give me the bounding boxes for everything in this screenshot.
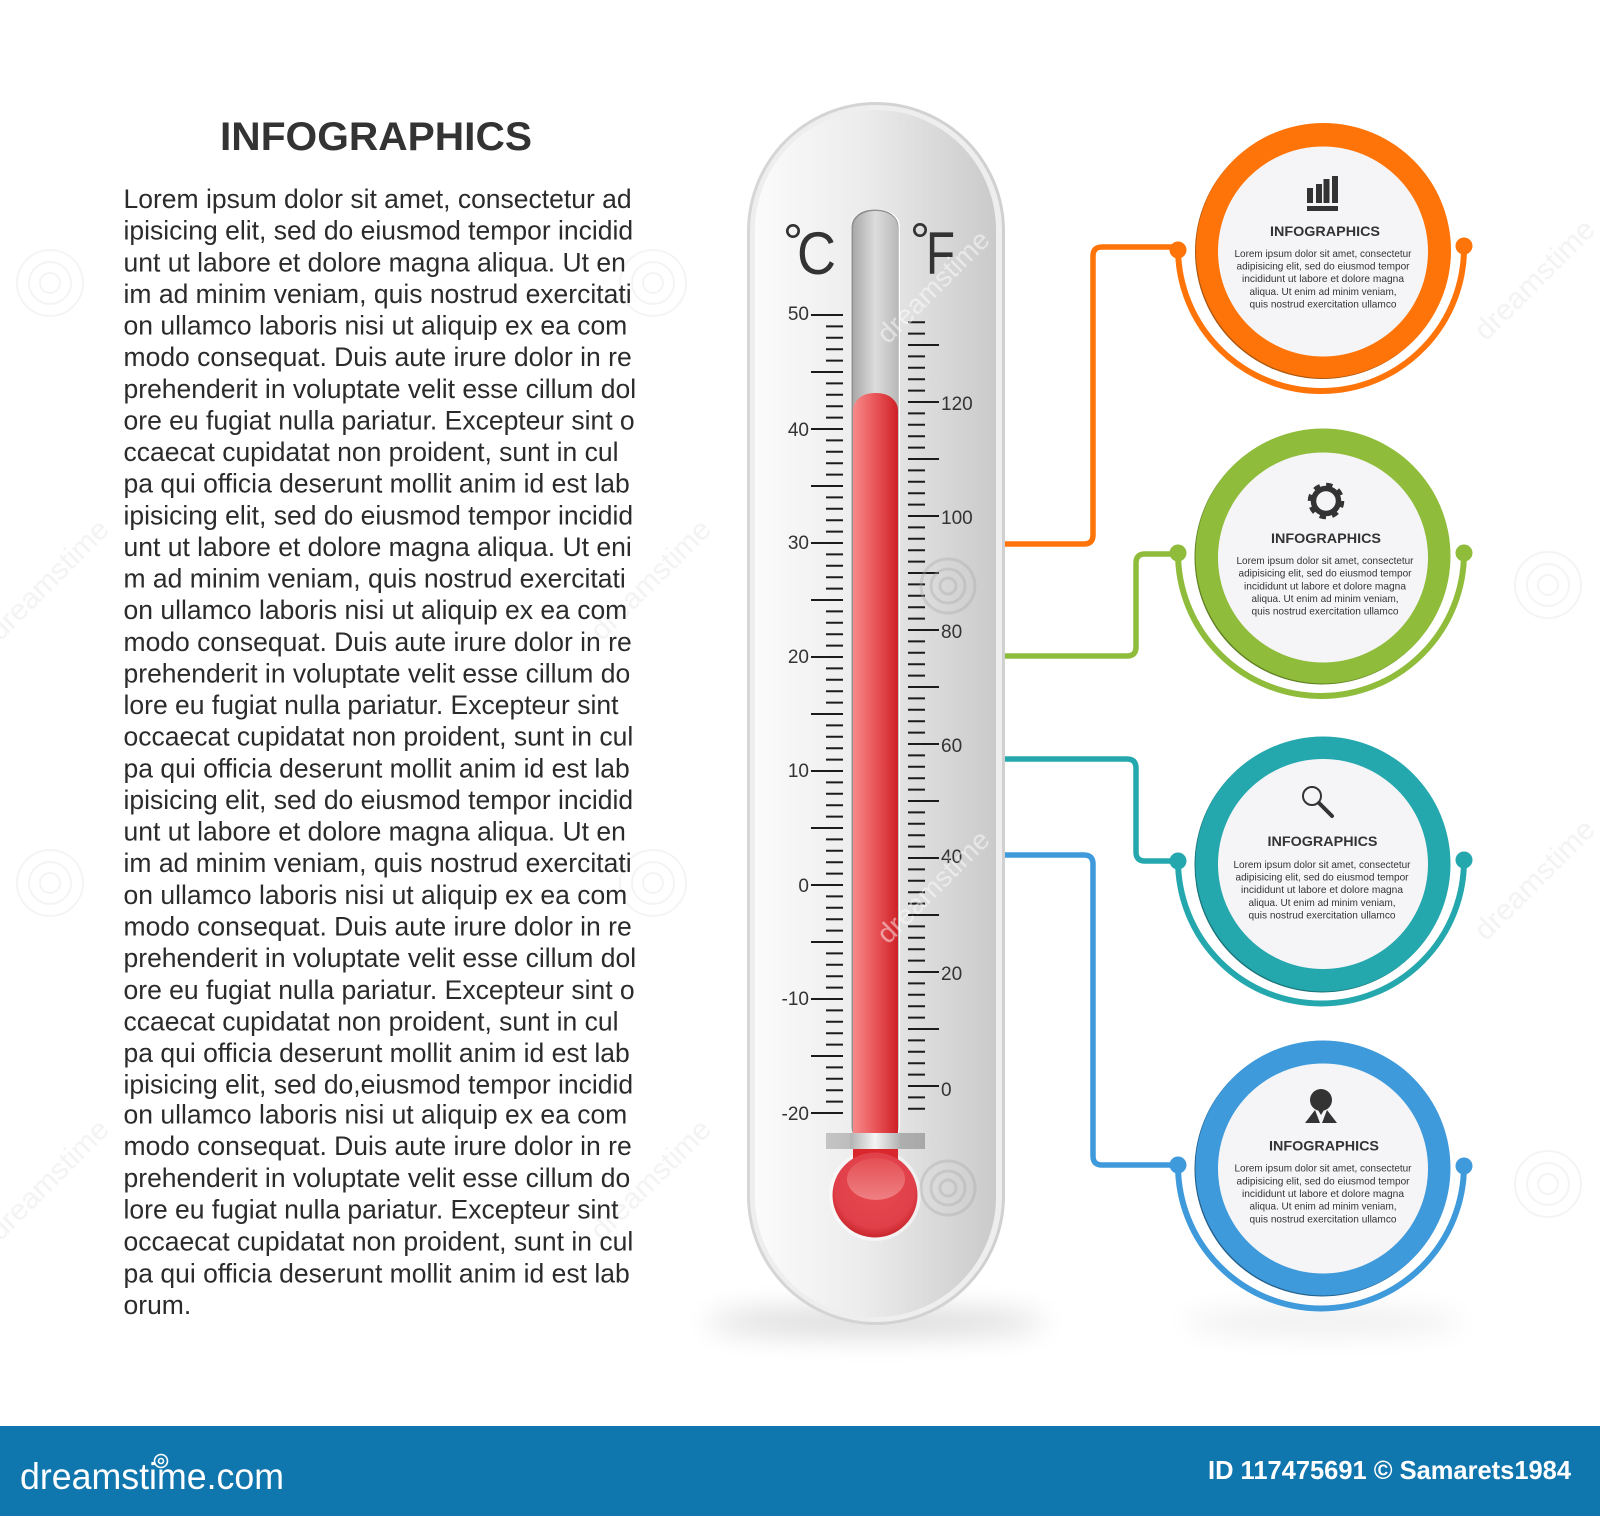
orange ring [1195, 123, 1451, 379]
fahrenheit unit: ° [910, 213, 930, 269]
text block: lorem ipsum paragraph [124, 184, 636, 1320]
celsius scale ticks [818, 314, 834, 1114]
green arc with dots [1170, 544, 1472, 696]
body text: Lorem ipsum dolor sit amet, consectetur [1236, 556, 1414, 567]
text block: lorem ipsum paragraph: m ad minim veniam, quis nostrud exercitati [124, 564, 626, 594]
text block: lorem ipsum paragraph: unt ut labore et dolore magna aliqua. Ut en [124, 817, 626, 847]
blue ring [1194, 1040, 1450, 1296]
body text: adipisicing elit, sed do eiusmod tempor [1238, 569, 1412, 580]
fahrenheit labels: 0 [941, 1080, 952, 1101]
connector: teal [1005, 759, 1178, 861]
heading: INFOGRAPHICS [1268, 833, 1378, 849]
text: dreamstime [584, 513, 718, 647]
fahrenheit labels: 40 [941, 847, 962, 868]
text block: lorem ipsum paragraph: on ullamco laboris nisi ut aliquip ex ea com [124, 1099, 627, 1129]
thermometer body [747, 102, 1005, 1325]
text block: lorem ipsum paragraph: on ullamco laboris nisi ut aliquip ex ea com [124, 595, 627, 625]
body text [1234, 860, 1411, 921]
orange arc with dots [1170, 238, 1472, 391]
body text: Lorem ipsum dolor sit amet, consectetur [1234, 249, 1412, 260]
text block: lorem ipsum paragraph: ore eu fugiat nulla pariatur. Excepteur sint o [124, 975, 635, 1005]
text block: lorem ipsum paragraph: ccaecat cupidatat non proident, sunt in cul [124, 437, 618, 467]
body text: adipisicing elit, sed do eiusmod tempor [1236, 262, 1410, 273]
text block: lorem ipsum paragraph: prehenderit in voluptate velit esse cillum dol [124, 374, 636, 404]
text block: lorem ipsum paragraph: ipisicing elit, sed do,eiusmod tempor incidid [124, 1070, 633, 1100]
icon: bar chart [1307, 176, 1338, 211]
body text [1234, 1164, 1412, 1225]
body text: quis nostrud exercitation ullamco [1248, 910, 1396, 921]
text block: lorem ipsum paragraph: ipisicing elit, sed do eiusmod tempor incidid [124, 785, 633, 815]
text: dreamstime [584, 1113, 718, 1247]
heading: INFOGRAPHICS [1269, 1138, 1379, 1154]
footer bar [0, 1426, 1600, 1516]
body text: adipisicing elit, sed do eiusmod tempor [1236, 1176, 1410, 1187]
celsius labels: -10 [782, 989, 809, 1010]
body text [1236, 556, 1414, 618]
text block: lorem ipsum paragraph: prehenderit in voluptate velit esse cillum dol [124, 943, 636, 973]
icon: magnifier [1303, 787, 1332, 816]
bulb [829, 1145, 921, 1241]
celsius labels: 50 [788, 304, 809, 325]
body text: incididunt ut labore et dolore magna [1242, 1189, 1404, 1200]
text block: lorem ipsum paragraph: pa qui officia deserunt mollit anim id est lab [124, 1038, 630, 1068]
celsius labels [782, 304, 809, 1125]
text block: lorem ipsum paragraph: im ad minim veniam, quis nostrud exercitati [124, 848, 632, 878]
text block: lorem ipsum paragraph: on ullamco laboris nisi ut aliquip ex ea com [124, 880, 627, 910]
text block: lorem ipsum paragraph: Lorem ipsum dolor sit amet, consectetur ad [124, 184, 632, 214]
celsius unit: ° [783, 214, 803, 270]
icon: person [1305, 1089, 1337, 1123]
connector: green [1005, 554, 1178, 656]
connector: blue [1005, 855, 1178, 1165]
text block: lorem ipsum paragraph: im ad minim veniam, quis nostrud exercitati [124, 279, 632, 309]
fahrenheit unit: F [926, 220, 955, 287]
celsius unit: C [797, 220, 836, 287]
thermometer shadow [706, 1308, 1046, 1336]
teal ring [1194, 736, 1450, 992]
fahrenheit labels: 100 [941, 508, 973, 529]
body text: incididunt ut labore et dolore magna [1242, 274, 1404, 285]
celsius labels: 0 [798, 876, 809, 897]
celsius labels: 40 [788, 420, 809, 441]
body text: incididunt ut labore et dolore magna [1244, 581, 1406, 592]
text block: lorem ipsum paragraph: lore eu fugiat nulla pariatur. Excepteur sint [124, 1195, 619, 1225]
text block: lorem ipsum paragraph: modo consequat. Duis aute irure dolor in re [124, 1131, 632, 1161]
panel: teal circle [1170, 736, 1472, 1004]
text block: lorem ipsum paragraph: pa qui officia deserunt mollit anim id est lab [124, 469, 630, 499]
icon: gear [1310, 485, 1342, 517]
body text: Lorem ipsum dolor sit amet, consectetur [1234, 860, 1411, 871]
text block: lorem ipsum paragraph: unt ut labore et dolore magna aliqua. Ut eni [124, 532, 632, 562]
text block: lorem ipsum paragraph: ipisicing elit, sed do eiusmod tempor incidid [124, 500, 633, 530]
body text: incididunt ut labore et dolore magna [1241, 885, 1403, 896]
text: dreamstime [870, 224, 996, 349]
text block: lorem ipsum paragraph: unt ut labore et dolore magna aliqua. Ut en [124, 247, 626, 277]
fahrenheit labels: 120 [941, 394, 973, 415]
heading: INFOGRAPHICS [1270, 223, 1380, 239]
text block: lorem ipsum paragraph: prehenderit in voluptate velit esse cillum do [124, 1163, 630, 1193]
blue arc with dots [1170, 1156, 1472, 1309]
text block: lorem ipsum paragraph: orum. [124, 1290, 191, 1320]
text block: lorem ipsum paragraph: occaecat cupidatat non proident, sunt in cul [124, 722, 633, 752]
title: INFOGRAPHICS [220, 115, 532, 159]
text block: lorem ipsum paragraph: modo consequat. Duis aute irure dolor in re [124, 912, 632, 942]
celsius labels: 30 [788, 533, 809, 554]
panel: green circle [1170, 428, 1472, 696]
body text: quis nostrud exercitation ullamco [1250, 1214, 1397, 1225]
text block: lorem ipsum paragraph: pa qui officia deserunt mollit anim id est lab [124, 753, 630, 783]
fahrenheit labels: 80 [941, 622, 962, 643]
glass tube [851, 209, 900, 1146]
connector: orange [1005, 247, 1178, 544]
body text: quis nostrud exercitation ullamco [1252, 607, 1399, 618]
text block: lorem ipsum paragraph: modo consequat. Duis aute irure dolor in re [124, 627, 632, 657]
celsius labels: -20 [782, 1104, 809, 1125]
text block: lorem ipsum paragraph: prehenderit in voluptate velit esse cillum do [124, 658, 630, 688]
body text: aliqua. Ut enim ad minim veniam, [1250, 287, 1396, 298]
shadow under blue circle [1183, 1312, 1463, 1332]
celsius labels: 20 [788, 647, 809, 668]
heading: INFOGRAPHICS [1271, 530, 1381, 546]
body text: aliqua. Ut enim ad minim veniam, [1252, 594, 1398, 605]
celsius unit [783, 214, 836, 287]
green ring [1194, 428, 1450, 684]
body text: quis nostrud exercitation ullamco [1250, 299, 1397, 310]
text block: lorem ipsum paragraph: pa qui officia deserunt mollit anim id est lab [124, 1258, 630, 1288]
mercury column [853, 393, 898, 1158]
fahrenheit labels: 60 [941, 736, 962, 757]
panel: blue circle [1170, 1040, 1472, 1309]
text: dreamstime [1468, 813, 1600, 947]
text block: lorem ipsum paragraph: ipisicing elit, sed do eiusmod tempor incidid [124, 216, 633, 246]
body text: Lorem ipsum dolor sit amet, consectetur [1234, 1164, 1412, 1175]
panel: orange circle [1170, 123, 1472, 391]
text block: lorem ipsum paragraph: modo consequat. Duis aute irure dolor in re [124, 342, 632, 372]
body text [1234, 249, 1412, 310]
collar [826, 1133, 925, 1149]
teal arc with dots [1170, 852, 1472, 1004]
footer logo: dreamstime.com [20, 1456, 284, 1497]
body text: aliqua. Ut enim ad minim veniam, [1250, 1202, 1396, 1213]
celsius labels: 10 [788, 761, 809, 782]
fahrenheit unit [910, 213, 955, 287]
text block: lorem ipsum paragraph: ccaecat cupidatat non proident, sunt in cul [124, 1006, 618, 1036]
text: dreamstime [1468, 213, 1600, 347]
thermometer [747, 102, 1005, 1325]
text block: lorem ipsum paragraph: lore eu fugiat nulla pariatur. Excepteur sint [124, 690, 619, 720]
fahrenheit labels [941, 394, 973, 1101]
footer credit: ID 117475691 © Samarets1984 [1208, 1455, 1572, 1485]
text block: lorem ipsum paragraph: occaecat cupidatat non proident, sunt in cul [124, 1226, 633, 1256]
body text: adipisicing elit, sed do eiusmod tempor [1236, 873, 1409, 884]
fahrenheit labels: 20 [941, 964, 962, 985]
fahrenheit scale ticks [916, 321, 932, 1111]
body text: aliqua. Ut enim ad minim veniam, [1248, 898, 1396, 909]
text: dreamstime [870, 824, 996, 949]
text block: lorem ipsum paragraph: on ullamco laboris nisi ut aliquip ex ea com [124, 310, 627, 340]
text block: lorem ipsum paragraph: ore eu fugiat nulla pariatur. Excepteur sint o [124, 405, 635, 435]
